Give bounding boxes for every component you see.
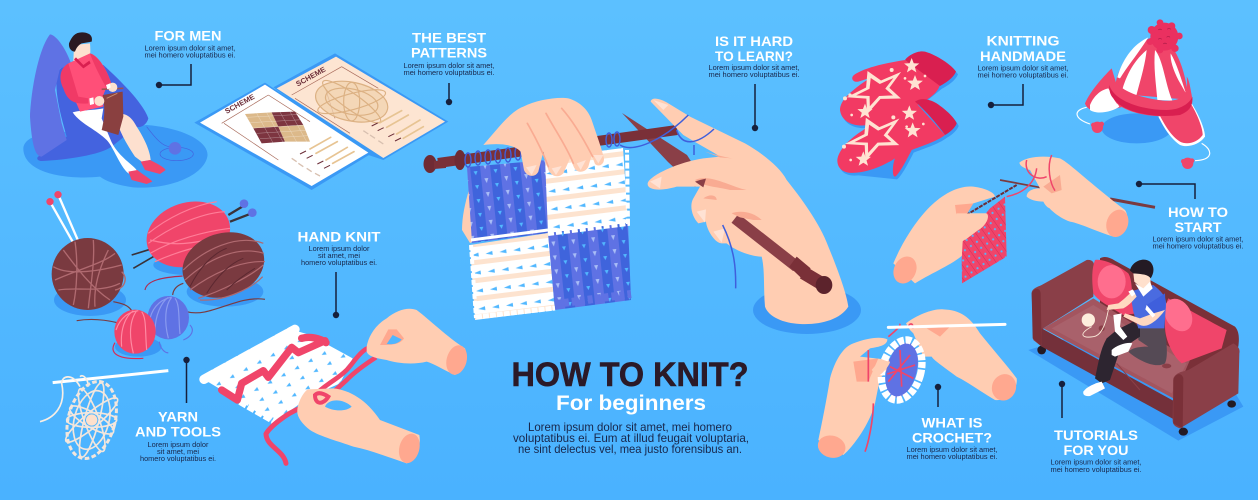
description text: ne sint delectus vel, mea justo forensibus an. xyxy=(518,442,742,456)
heading: knitting handmade: KNITTING xyxy=(986,32,1060,48)
illustration: pattern sheets: SCHEME xyxy=(294,65,327,88)
heading: yarn and tools: homero voluptatibus ei. xyxy=(140,454,216,463)
heading: tutorials for you: TUTORIALS xyxy=(1054,427,1138,443)
heading: what is crochet: mei homero voluptatibus ei. xyxy=(906,452,998,461)
title: For beginners xyxy=(556,392,706,415)
heading: the best patterns xyxy=(404,30,494,77)
heading: what is crochet: WHAT IS xyxy=(922,415,982,431)
heading: hand knit xyxy=(298,229,381,267)
heading: hand knit: HAND KNIT xyxy=(298,229,381,245)
illustration: yarn and needles xyxy=(46,191,273,359)
heading: knitting handmade xyxy=(978,32,1068,80)
heading: what is crochet: Lorem ipsum dolor sit amet, xyxy=(906,445,998,454)
illustration: pattern sheets xyxy=(194,53,448,190)
heading: is it hard to learn: IS IT HARD xyxy=(715,33,793,49)
title: HOW TO KNIT? xyxy=(512,356,748,394)
heading: is it hard to learn: mei homero voluptatibus ei. xyxy=(708,70,800,79)
heading: is it hard to learn: TO LEARN? xyxy=(715,48,793,64)
heading: knitting handmade: HANDMADE xyxy=(980,48,1066,64)
connector: handmade xyxy=(988,84,1023,108)
heading: for men: FOR MEN xyxy=(154,28,222,44)
heading: tutorials for you: mei homero voluptatibus ei. xyxy=(1050,465,1142,474)
connector: for men xyxy=(156,64,191,88)
heading: the best patterns: Lorem ipsum dolor sit amet, xyxy=(404,61,494,70)
heading: yarn and tools: AND TOOLS xyxy=(135,424,221,440)
heading: what is crochet xyxy=(906,415,998,461)
connector: hand knit xyxy=(333,272,339,318)
illustration: man knitting on beanbag xyxy=(23,32,208,188)
heading: how to start: START xyxy=(1174,219,1222,235)
connector: tutorials xyxy=(1059,381,1065,418)
heading: hand knit: Lorem ipsum dolor xyxy=(308,244,370,253)
heading: for men: mei homero voluptatibus ei. xyxy=(144,50,236,60)
heading: for men: Lorem ipsum dolor sit amet, xyxy=(144,44,236,52)
heading: yarn and tools: YARN xyxy=(158,409,198,425)
heading: how to start xyxy=(1152,204,1244,251)
description text: Lorem ipsum dolor sit amet, mei homero xyxy=(528,420,732,434)
illustration: two hands starting knit xyxy=(889,155,1155,287)
connector: learn xyxy=(752,84,758,131)
title xyxy=(512,356,748,415)
heading: how to start: mei homero voluptatibus ei. xyxy=(1152,242,1244,251)
illustration: hat xyxy=(1077,19,1210,169)
connector: patterns xyxy=(446,83,452,105)
heading: the best patterns: PATTERNS xyxy=(411,44,487,60)
heading: for men xyxy=(144,28,236,60)
heading: what is crochet: CROCHET? xyxy=(912,430,992,446)
heading: knitting handmade: mei homero voluptatibus ei. xyxy=(978,70,1068,80)
description text: voluptatibus ei. Eum at illud feugait voluptaria, xyxy=(513,431,749,445)
illustration: hand knitting chain xyxy=(204,309,470,465)
heading: knitting handmade: Lorem ipsum dolor sit amet, xyxy=(978,64,1068,72)
description text xyxy=(513,420,749,456)
connector: yarn xyxy=(183,357,190,403)
heading: tutorials for you: Lorem ipsum dolor sit amet, xyxy=(1050,458,1142,467)
heading: yarn and tools xyxy=(135,409,221,463)
connector: start xyxy=(1136,181,1195,199)
heading: hand knit: homero voluptatibus ei. xyxy=(301,258,377,267)
heading: is it hard to learn: Lorem ipsum dolor sit amet, xyxy=(708,63,800,72)
heading: yarn and tools: Lorem ipsum dolor xyxy=(148,440,209,449)
illustration: pattern sheets: SCHEME xyxy=(223,92,256,116)
connector: crochet xyxy=(935,384,941,407)
heading: the best patterns: mei homero voluptatibus ei. xyxy=(404,68,494,77)
illustration: mittens xyxy=(837,51,959,179)
heading: how to start: Lorem ipsum dolor sit amet, xyxy=(1152,234,1244,244)
heading: tutorials for you xyxy=(1050,427,1142,474)
heading: the best patterns: THE BEST xyxy=(412,30,486,46)
heading: yarn and tools: sit amet, mei xyxy=(157,447,199,456)
illustration: central knitting hands xyxy=(424,98,861,334)
illustration: crochet hands xyxy=(815,309,1020,461)
heading: how to start: HOW TO xyxy=(1168,204,1228,220)
illustration: crochet hook and doily xyxy=(40,371,168,465)
heading: is it hard to learn xyxy=(708,33,800,79)
illustration: person knitting on sofa xyxy=(1028,257,1243,441)
heading: hand knit: sit amet, mei xyxy=(318,251,360,260)
heading: tutorials for you: FOR YOU xyxy=(1064,442,1128,458)
